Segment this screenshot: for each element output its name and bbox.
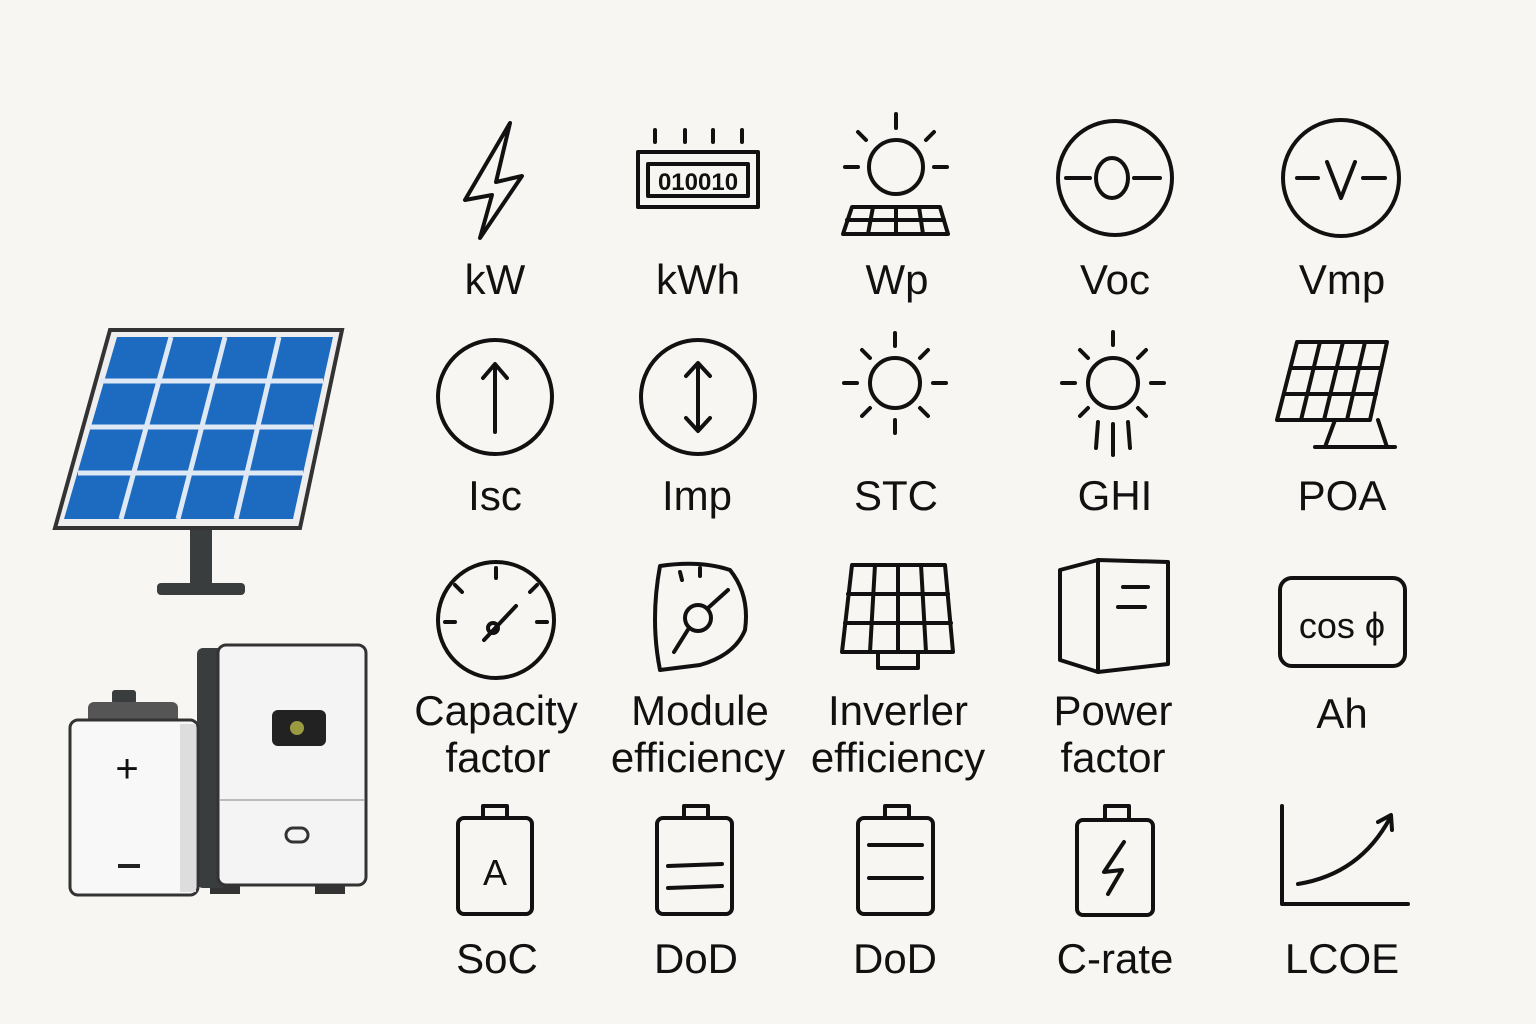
icon: DoD battery 2	[858, 806, 933, 914]
label Power factor: factor	[1060, 734, 1166, 781]
battery and inverter cabinet illustration	[70, 645, 366, 895]
label Isc: Isc	[468, 472, 522, 519]
label Capacity factor	[414, 687, 578, 781]
label LCOE: LCOE	[1285, 935, 1399, 982]
label Module efficiency: efficiency	[611, 734, 785, 781]
label Power factor	[1053, 687, 1173, 781]
label STC: STC	[854, 472, 938, 519]
icon: Wp sun panel	[843, 114, 948, 234]
label Module efficiency: Module	[631, 687, 769, 734]
battery and inverter cabinet illustration: +	[115, 747, 139, 791]
icon: kWh meter	[638, 130, 758, 207]
label DoD 2: DoD	[853, 935, 937, 982]
icon: Isc	[438, 340, 552, 454]
icon: kWh meter: 010010	[658, 169, 738, 196]
icon: inverter efficiency grid	[842, 565, 953, 668]
icon: DoD battery	[657, 806, 732, 914]
solar panel illustration	[55, 330, 342, 595]
icon: Imp	[641, 340, 755, 454]
icon: Voc	[1058, 121, 1172, 235]
icon: cos phi	[1280, 578, 1405, 666]
label SoC: SoC	[456, 935, 538, 982]
icon: SoC battery	[458, 806, 532, 914]
icon: SoC battery: A	[483, 852, 507, 893]
icon: POA panel	[1277, 342, 1395, 447]
label Module efficiency	[611, 687, 785, 781]
label kWh: kWh	[656, 256, 740, 303]
label C-rate: C-rate	[1057, 935, 1173, 982]
label POA: POA	[1298, 472, 1386, 519]
label Inverter efficiency	[811, 687, 985, 781]
label Capacity factor: factor	[445, 734, 551, 781]
label DoD: DoD	[654, 935, 738, 982]
icon: Vmp	[1283, 120, 1399, 236]
label Vmp: Vmp	[1299, 256, 1385, 303]
icon: kW lightning	[465, 123, 522, 238]
label Ah: Ah	[1316, 690, 1368, 737]
label Capacity factor: Capacity	[414, 687, 578, 734]
label GHI: GHI	[1078, 472, 1152, 519]
label kW: kW	[465, 256, 526, 303]
icon: capacity factor gauge	[438, 562, 554, 678]
label Wp: Wp	[866, 256, 928, 303]
label Imp: Imp	[662, 472, 732, 519]
icon: GHI sun rays	[1062, 332, 1164, 455]
icon: power factor cabinet	[1060, 560, 1168, 672]
label Voc: Voc	[1080, 256, 1150, 303]
label Inverter efficiency: efficiency	[811, 734, 985, 781]
icon: module efficiency	[655, 564, 746, 670]
label Power factor: Power	[1053, 687, 1173, 734]
icon: cos phi: cos ϕ	[1299, 605, 1385, 646]
icon: LCOE chart	[1282, 806, 1408, 904]
icon: C-rate battery	[1077, 806, 1153, 915]
label Inverter efficiency: Inverler	[828, 687, 968, 734]
icon: STC sun	[844, 333, 946, 433]
